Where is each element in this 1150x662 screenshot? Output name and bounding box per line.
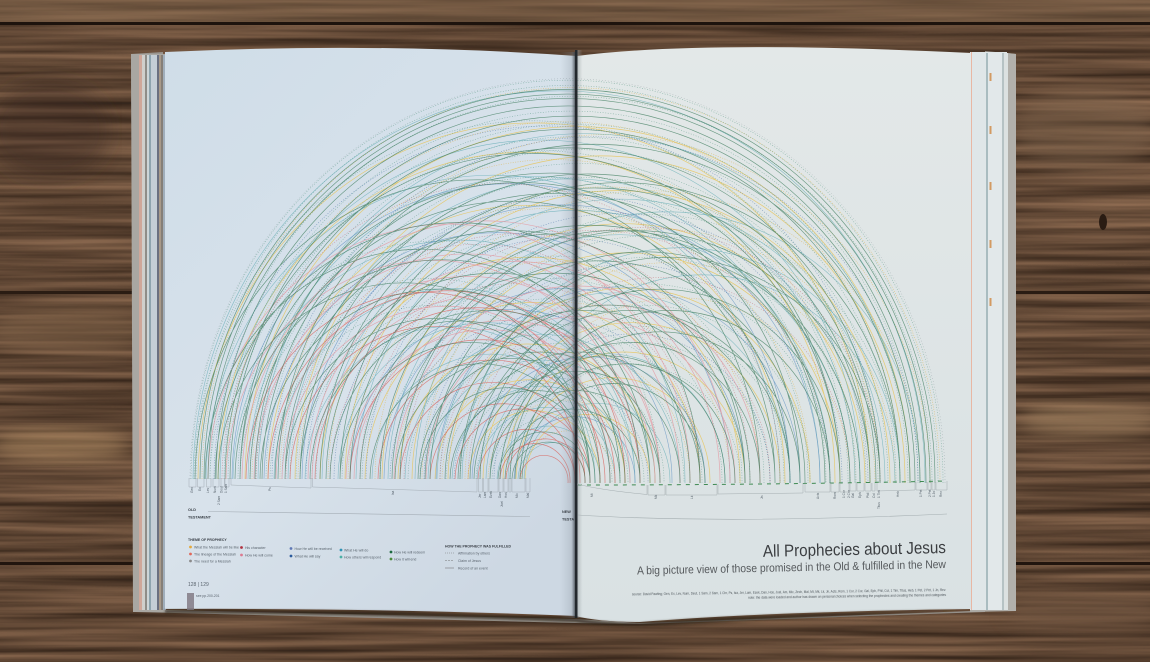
title: All Prophecies about Jesus xyxy=(763,538,946,561)
solid arrow xyxy=(445,567,454,569)
new testament book labels: 1 Jn xyxy=(932,491,936,497)
new testament book labels: Phil xyxy=(866,492,870,498)
subtitle: A big picture view of those promised in the Old & fulfilled in the New xyxy=(637,559,947,577)
old testament book labels: Gen xyxy=(190,487,194,493)
arcs: blue xyxy=(232,184,820,483)
new testament book labels: Col xyxy=(872,493,876,498)
legend: how the prophecy was fulfilled: Claim of Jesus xyxy=(458,559,481,563)
legend: how the prophecy was fulfilled xyxy=(445,544,512,570)
new testament label: TESTA xyxy=(562,518,574,522)
new testament book labels: Mk xyxy=(654,494,658,499)
legend heading: THEME OF PROPHECY xyxy=(188,538,227,542)
old testament book labels: Mal xyxy=(526,493,530,498)
new testament label xyxy=(562,510,574,522)
new testament book labels xyxy=(590,489,943,509)
legend column 2 xyxy=(240,546,273,557)
legend column 1 xyxy=(189,545,239,563)
legend column 2: His character xyxy=(245,546,266,550)
dotted arrow xyxy=(445,552,454,554)
old testament book labels: Lev xyxy=(206,487,210,493)
new testament book labels: Rev xyxy=(939,491,943,497)
arc diagram of prophecies xyxy=(190,79,945,485)
new testament book labels: Rom xyxy=(833,492,837,499)
panel: right page xyxy=(575,47,971,622)
old testament book labels: Hos xyxy=(504,492,508,498)
book cover and page edges xyxy=(131,51,1016,624)
arcs: red dotted xyxy=(222,184,880,483)
new testament book labels: 1 Cor xyxy=(842,489,846,498)
legend column 3: How He will be received xyxy=(294,547,332,551)
new testament book brackets xyxy=(577,481,947,495)
new testament book labels: Jn xyxy=(760,495,764,499)
new testament book labels: Acts xyxy=(816,492,820,499)
legend column 3: What He will say xyxy=(294,554,321,558)
legend column 2: How He will come xyxy=(245,553,273,557)
new testament book labels: Titus xyxy=(877,502,881,509)
new testament book labels: Lk xyxy=(690,495,694,499)
panel: left page xyxy=(165,48,577,616)
source note: note: the data were loaded and author has drawn on personal choices when selecting the prophecies and creating the themes and categories xyxy=(748,593,946,600)
old testament book labels: Dan xyxy=(498,492,502,498)
new testament book labels: Gal xyxy=(851,493,855,498)
arcs: yellow solid xyxy=(198,123,910,483)
gutter of the book xyxy=(560,50,582,618)
arcs: dark green solid xyxy=(195,89,935,483)
legend column 5: How it will end xyxy=(394,557,416,561)
old testament book labels xyxy=(190,483,530,507)
legend column 1: What the Messiah will be like xyxy=(194,545,239,549)
legend: how the prophecy was fulfilled: HOW THE PROPHECY WAS FULFILLED xyxy=(445,544,512,548)
old testament book labels: Deut xyxy=(220,486,224,493)
old testament label: OLD xyxy=(188,508,196,512)
legend: how the prophecy was fulfilled: Record of an event xyxy=(458,566,488,570)
old testament book labels: 1 Sam xyxy=(224,483,228,493)
legend: theme of prophecy xyxy=(188,538,425,563)
new testament book labels: 1 Pet xyxy=(919,489,923,497)
old testament book labels: Ps xyxy=(268,487,272,491)
arcs: dotted green xyxy=(191,80,943,483)
source note: source: David Pawling; Gen, Ex, Lev, Num, Deut, 1 Sam, 2 Sam, 1 Chr, Ps, Isa, Jer, Lam, Ezek, Dan, Hos, Joel, Am, Mic, Zech, Mal, Mt, Mk, Lk, Jn, Acts, Rom, 1 Cor, 2 Cor, Gal, Eph, Phil, Col, 1 Tim, Titus, Heb, 1 Pet, 2 Pet, 1 Jn, Rev. xyxy=(632,588,946,596)
legend column 4 xyxy=(340,548,381,559)
old testament book labels: Ezek xyxy=(489,491,493,498)
legend column 5: How He will redeem xyxy=(394,550,425,554)
legend column 1: The lineage of the Messiah xyxy=(194,552,236,556)
old testament book labels: Lam xyxy=(483,491,487,498)
new testament book labels: 2 Cor xyxy=(847,489,851,498)
old testament book brackets xyxy=(189,478,530,492)
new testament book labels: Mt xyxy=(590,493,594,497)
old testament axis xyxy=(189,478,530,507)
source note xyxy=(632,588,946,601)
arcs: red and pink xyxy=(246,291,640,483)
old testament label xyxy=(188,508,212,520)
outer faint arc xyxy=(190,79,945,483)
dashed arrow xyxy=(445,560,454,562)
grey page tab xyxy=(187,593,194,610)
legend column 3 xyxy=(290,547,332,558)
old testament book labels: Ex xyxy=(198,487,202,491)
old testament book labels: Isa xyxy=(391,491,395,495)
new testament axis xyxy=(577,481,947,509)
new testament label: NEW xyxy=(562,510,571,514)
arcs: yellow dotted xyxy=(202,88,940,483)
arcs: pink and orange xyxy=(208,221,760,483)
new testament book labels: 1 Tim xyxy=(877,490,881,498)
legend column 1: The need for a Messiah xyxy=(194,559,231,563)
new testament book labels: Eph xyxy=(858,492,862,498)
legend column 4: How others will respond xyxy=(344,555,381,559)
new testament book labels: Heb xyxy=(896,491,900,497)
legend column 5 xyxy=(390,550,425,561)
old testament book labels: Mic xyxy=(515,493,519,498)
legend column 4: What He will do xyxy=(344,548,368,552)
book shadow under pages xyxy=(165,610,971,626)
cross reference: see pp.200-201 xyxy=(196,594,220,598)
old testament book labels: Jer xyxy=(478,493,482,498)
old testament book labels: Num xyxy=(213,486,217,493)
coloured baseline dots xyxy=(578,481,945,485)
old testament book labels: Joel xyxy=(500,501,504,507)
old testament book labels: 2 Sam xyxy=(217,495,221,505)
arcs: teal solid xyxy=(193,91,925,483)
arcs: blue dotted xyxy=(214,126,918,483)
old testament label: TESTAMENT xyxy=(188,516,212,520)
page numbers: 128 | 129 xyxy=(188,582,209,588)
new testament book labels: 2 Pet xyxy=(928,489,932,497)
legend: how the prophecy was fulfilled: Affirmation by others xyxy=(458,552,490,556)
